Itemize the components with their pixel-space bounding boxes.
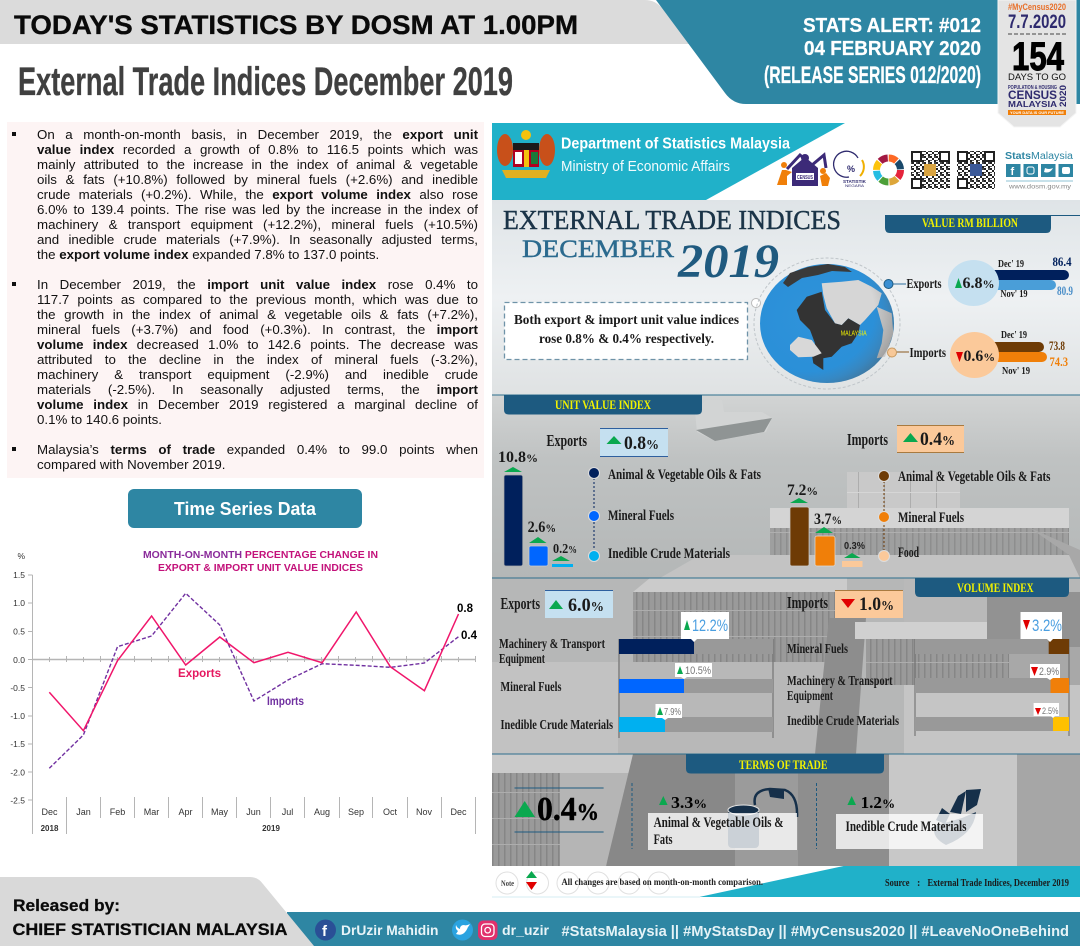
paragraph: export indices: machinery & transport equipment (+12.2%), mineral fuels (+10.5%) (37, 217, 478, 232)
note legend: All changes are based on month-on-month comparison. (562, 878, 763, 888)
chart title: MONTH-ON-MONTH PERCENTAGE CHANGE IN (143, 549, 378, 561)
time series data button (128, 489, 362, 528)
month labels: Sep (348, 807, 364, 817)
month labels: Dec (41, 807, 58, 817)
exports unit value headline: Exports (546, 431, 587, 450)
bullet 2 (12, 282, 16, 286)
header: grey title band (0, 0, 690, 44)
section label: terms of trade (686, 754, 884, 774)
icon: QR code 1 (911, 151, 950, 189)
callout: 2.5% (1034, 703, 1059, 718)
paragraph: terms of trade: Malaysia’s terms of trade expanded 0.4% to 99.0 points when (37, 442, 478, 456)
footer: grey released-by panel (0, 877, 314, 946)
paragraph: import indices: materials (-2.5%). In seasonally adjusted terms, the import (37, 382, 478, 397)
y axis labels: -0.5 (10, 683, 25, 693)
series: imports (49, 593, 459, 768)
census countdown badge: MALAYSIA (1008, 100, 1057, 109)
heading: today's statistics: TODAY'S STATISTICS BY DOSM AT 1.00PM (14, 10, 578, 40)
series labels: Imports (267, 696, 304, 708)
month labels: Oct (383, 807, 397, 817)
imports volume headline: 1.0% (859, 594, 894, 615)
value: exports: 86.4 (1052, 254, 1072, 269)
imports bar chart: 0.3% (844, 541, 865, 552)
imports volume bars: Inedible Crude Materials (787, 713, 899, 728)
terms: inedible crude materials: Inedible Crude Materials (846, 819, 967, 835)
y axis labels: -2.0 (10, 768, 25, 778)
imports legend (878, 469, 1051, 562)
bullet 3 (12, 447, 16, 451)
section label: volume index (915, 578, 1069, 597)
social handles: dr_uzir (502, 922, 550, 938)
y axis labels: 0.0 (13, 655, 25, 665)
month labels: Nov (416, 807, 432, 817)
paragraph: export indices: On a month-on-month basis, in December 2019, the export unit (37, 126, 478, 142)
panel: volume index (499, 578, 1069, 738)
callout: 2.9% (1030, 664, 1060, 680)
icon: census logo: CENSUS (797, 175, 814, 181)
paragraph: import indices: attributed to the decline in the index of mineral fuels (-3.2%), (37, 352, 478, 367)
paragraph: terms of trade: compared with November 2019. (37, 457, 225, 472)
icon: QR code 2 (957, 151, 995, 189)
exports volume bars (499, 612, 773, 738)
y axis labels (10, 551, 25, 806)
callout: 12.2% (681, 612, 729, 642)
callout: both export and import (504, 298, 760, 360)
exports bar chart: 0.2% (553, 542, 577, 557)
series: exports (49, 612, 459, 731)
icon: oil barrel and pump nozzle (728, 788, 797, 848)
y axis labels: -1.0 (10, 711, 25, 721)
statsmalaysia social block: f (1010, 166, 1014, 178)
paragraph: import indices (37, 276, 478, 427)
banner: department of statistics (492, 123, 845, 200)
statsmalaysia social block: www.dosm.gov.my (1008, 184, 1072, 190)
globe (754, 258, 900, 389)
text panel: commentary (7, 122, 484, 478)
released by text: CHIEF STATISTICIAN MALAYSIA (12, 921, 288, 939)
exports bar chart (498, 449, 577, 567)
line chart: month-on-month percentage change (10, 549, 478, 834)
bullet 1 (12, 132, 16, 136)
social handles: DrUzir Mahidin (341, 922, 438, 938)
paragraph: import indices: the growth in the index of animal & vegetable oils & fats (+7.2%), (37, 307, 478, 322)
imports volume bars: Equipment (787, 688, 833, 703)
chart title (143, 549, 378, 574)
series labels: 0.4 (461, 630, 478, 642)
section label: unit value index: UNIT VALUE INDEX (555, 397, 651, 412)
paragraph: terms of trade (37, 442, 478, 472)
value: imports: 0.6% (964, 348, 995, 365)
month labels: Jul (282, 807, 293, 817)
source banner: : (917, 878, 920, 889)
icon: statistik negara logo: STATISTIK (843, 179, 867, 184)
social handles: f (322, 923, 328, 940)
released by text: Released by: (13, 897, 120, 915)
paragraph: import indices: 0.1% to 140.6 points. (37, 412, 162, 427)
series labels: 0.8 (457, 603, 474, 615)
icon: coat of arms (497, 130, 555, 178)
globe: MALAYSIA (841, 331, 867, 338)
imports unit value headline: Imports (847, 430, 888, 449)
value: imports: Nov' 19 (1002, 366, 1030, 377)
paragraph: export indices (37, 126, 478, 262)
banner: department of statistics: Ministry of Economic Affairs (561, 158, 730, 175)
chart axes (28, 575, 476, 834)
callout: both export and import: Both export & import unit value indices (514, 313, 740, 328)
section label: volume index: VOLUME INDEX (957, 580, 1034, 595)
icon: statistik negara logo (834, 151, 867, 188)
panel: unit value index (498, 395, 1051, 567)
note legend (492, 871, 763, 898)
panel: right infographic background (492, 200, 1080, 866)
value: exports: 80.9 (1057, 283, 1073, 298)
title: external trade indices: External Trade Indices December 2019 (18, 60, 513, 104)
month labels: 2019 (262, 824, 280, 833)
paragraph: export indices: the export volume index expanded 7.8% to 137.0 points. (37, 247, 379, 262)
imports volume headline (787, 590, 903, 618)
imports volume bars: Machinery & Transport (787, 673, 893, 688)
exports legend (588, 467, 761, 562)
paragraph: export indices: mainly attributed to the increase in the index of animal & vegetable (37, 157, 478, 172)
callout: 2.9%: 2.9% (1039, 666, 1059, 678)
terms: animal and vegetable oils: Fats (654, 832, 673, 848)
y axis labels: -2.5 (10, 796, 25, 806)
census countdown badge: POPULATION & HOUSING (1008, 85, 1057, 91)
stats alert text: STATS ALERT: #012 (803, 15, 981, 37)
month labels: Feb (110, 807, 125, 817)
paragraph: import indices: In December 2019, the import unit value index rose 0.4% to (37, 276, 478, 292)
value: exports: Exports (906, 277, 942, 292)
month labels: May (211, 807, 228, 817)
callout: 3.2% (1020, 612, 1062, 642)
icon: SDG wheel (876, 158, 900, 182)
statsmalaysia social block: StatsMalaysia (1005, 151, 1073, 162)
section label: value rm billion: VALUE RM BILLION (922, 215, 1018, 230)
paragraph: import indices: mineral fuels (+3.7%) and food (+0.3%). In contrast, the import (37, 322, 478, 337)
terms: animal and vegetable oils: 3.3% (671, 793, 707, 812)
footer: teal social bar (287, 912, 1080, 946)
exports unit value headline: 0.8% (624, 433, 659, 454)
terms: animal and vegetable oils: Animal & Vegetable Oils & (654, 815, 784, 831)
exports legend: Mineral Fuels (608, 508, 674, 524)
source banner: Source (885, 878, 910, 889)
y axis labels: 1.5 (13, 570, 25, 580)
panel: terms of trade (514, 754, 983, 850)
census countdown badge: YOUR DATA IS OUR FUTURE (1010, 110, 1064, 115)
exports legend: Animal & Vegetable Oils & Fats (608, 467, 761, 483)
icon: statistik negara logo: NEGARA (845, 183, 864, 188)
section label: terms of trade: TERMS OF TRADE (739, 757, 828, 772)
hashtags: #StatsMalaysia || #MyStatsDay || #MyCensus2020 || #LeaveNoOneBehind (562, 923, 1069, 940)
value: imports: Imports (910, 346, 946, 361)
census countdown badge: 2020 (1058, 85, 1068, 107)
month labels: Apr (178, 807, 193, 817)
callout: 2.5%: 2.5% (1042, 706, 1059, 717)
time series data button: Time Series Data (174, 499, 317, 519)
imports volume bars (787, 612, 1069, 736)
paragraph: import indices: machinery & transport equipment (-2.9%) and inedible crude (37, 367, 478, 382)
paragraph: export indices: oils & fats (+10.8%) followed by mineral fuels (+2.6%) and inedible (37, 172, 478, 187)
section label: value rm billion (885, 215, 1080, 233)
imports unit value headline: 0.4% (920, 429, 955, 450)
paragraph: export indices: crude materials (+0.2%). While, the export volume index also rose (37, 187, 478, 202)
paragraph: export indices: and inedible crude materials (+7.9%). In seasonally adjusted terms, (37, 232, 478, 247)
exports volume headline: Exports (500, 594, 540, 613)
callout: 7.9%: 7.9% (664, 707, 681, 718)
chart title: EXPORT & IMPORT UNIT VALUE INDICES (158, 562, 363, 574)
callout: 12.2%: 12.2% (692, 616, 728, 635)
value: imports (888, 330, 1068, 378)
imports bar chart: 3.7% (814, 511, 842, 528)
paragraph: export indices: value index recorded a growth of 0.8% to 116.5 points which was (37, 142, 478, 157)
month labels: Jan (76, 807, 91, 817)
terms: inedible crude materials (836, 793, 983, 849)
callout: both export and import: rose 0.8% & 0.4% respectively. (539, 332, 714, 347)
month labels: Dec (450, 807, 467, 817)
header: teal stats alert panel (656, 0, 1080, 104)
month labels: Jun (246, 807, 261, 817)
exports volume bars: Mineral Fuels (500, 679, 562, 694)
title: external trade indices 2019: DECEMBER (522, 236, 674, 263)
callout: 7.9% (656, 704, 682, 720)
census countdown badge: 154 (1012, 35, 1065, 79)
paragraph: export indices: 6.0% to 139.4 points. The rise was led by the increase in the index of (37, 202, 478, 217)
value: imports: Dec' 19 (1001, 330, 1027, 341)
census countdown badge (998, 0, 1076, 127)
exports bar chart: 2.6% (528, 519, 556, 536)
exports volume bars: Inedible Crude Materials (500, 717, 613, 732)
value: exports: Nov' 19 (1000, 289, 1028, 300)
y axis labels: % (17, 551, 25, 561)
series labels (178, 603, 478, 708)
title: external trade indices 2019 (503, 205, 841, 288)
census countdown badge: #MyCensus2020 (1008, 2, 1066, 13)
section rule lines (492, 395, 1080, 754)
value: imports: 73.8 (1049, 338, 1065, 353)
callout: 10.5% (675, 663, 712, 679)
imports volume bars: Mineral Fuels (787, 641, 848, 656)
exports volume headline: 6.0% (568, 595, 604, 616)
paragraph: import indices: volume index in December 2019 registered a marginal decline of (37, 397, 478, 412)
statsmalaysia social block (1005, 151, 1073, 190)
exports unit value headline (546, 428, 668, 457)
census countdown badge: CENSUS (1008, 88, 1057, 102)
value: exports: Dec' 19 (998, 259, 1024, 270)
imports bar chart (787, 482, 865, 567)
value: exports (884, 254, 1073, 306)
released by text (12, 897, 288, 939)
exports legend: Inedible Crude Materials (608, 546, 730, 562)
y axis labels: 0.5 (13, 626, 25, 636)
terms: animal and vegetable oils (648, 793, 797, 850)
month labels (41, 807, 467, 833)
imports legend: Mineral Fuels (898, 510, 964, 526)
series labels: Exports (178, 668, 221, 680)
terms of trade headline (514, 788, 604, 832)
census countdown badge: DAYS TO GO (1008, 72, 1066, 82)
y axis labels: -1.5 (10, 739, 25, 749)
callout: 10.5%: 10.5% (685, 665, 711, 677)
title: external trade indices 2019: EXTERNAL TRADE INDICES (503, 205, 841, 235)
banner: department of statistics: Department of Statistics Malaysia (561, 136, 790, 152)
y axis labels: 1.0 (13, 598, 25, 608)
imports volume headline: Imports (787, 593, 828, 612)
imports legend: Food (898, 545, 919, 561)
stats alert text (764, 15, 981, 89)
month labels: Mar (144, 807, 159, 817)
exports volume headline (500, 590, 613, 618)
exports volume bars: Equipment (499, 651, 545, 666)
month labels: 2018 (41, 824, 59, 833)
paragraph: import indices: volume index decreased 1.0% to 142.6 points. The decrease was (37, 337, 478, 352)
terms: inedible crude materials: 1.2% (861, 793, 895, 812)
terms of trade headline: 0.4% (537, 791, 599, 828)
icon: leaf (934, 789, 981, 845)
value: exports: 6.8% (962, 275, 994, 292)
imports unit value headline (847, 425, 964, 453)
social handles (315, 920, 550, 940)
exports volume bars: Machinery & Transport (499, 636, 605, 651)
exports bar chart: 10.8% (498, 449, 538, 466)
census countdown badge: 7.7.2020 (1008, 12, 1066, 33)
paragraph: import indices: 117.7 points as compared to the previous month, which was due to (37, 292, 478, 307)
stats alert text: 04 FEBRUARY 2020 (804, 38, 981, 60)
source banner (699, 866, 1080, 897)
callout: 3.2%: 3.2% (1032, 616, 1062, 635)
imports bar chart: 7.2% (787, 482, 818, 499)
note legend: Note (501, 879, 514, 888)
section label: unit value index (504, 395, 702, 414)
icon: statistik negara logo: % (847, 164, 855, 174)
month labels: Aug (314, 807, 330, 817)
icon: census logo (777, 154, 830, 186)
title: external trade indices 2019: 2019 (677, 235, 779, 288)
value: imports: 74.3 (1050, 354, 1068, 369)
